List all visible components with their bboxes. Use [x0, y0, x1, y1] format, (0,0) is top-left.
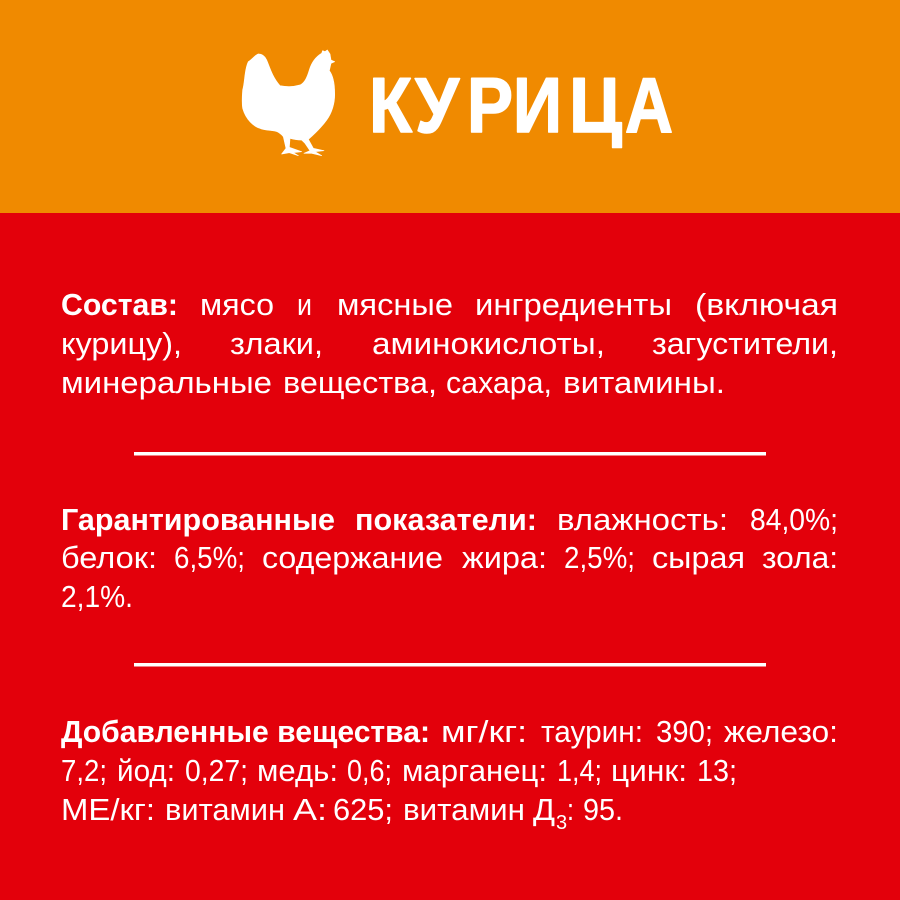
text block: additives: 0,6;	[347, 753, 392, 788]
title: И	[513, 61, 562, 149]
divider	[134, 452, 766, 456]
text block: additives: железо:	[724, 714, 838, 749]
text block: guaranteed values: содержание	[262, 540, 443, 575]
title: К	[369, 61, 412, 149]
text block: guaranteed values: сырая	[652, 540, 745, 575]
text block: composition: мясные	[337, 287, 453, 322]
title	[369, 61, 673, 149]
text block: additives: 390;	[656, 714, 713, 749]
text block: composition: и	[297, 287, 312, 322]
text block: guaranteed values: 84,0%;	[750, 502, 838, 537]
text block: composition: витамины.	[563, 365, 725, 400]
divider	[134, 663, 766, 666]
title: Р	[467, 61, 513, 149]
text block: guaranteed values: влажность:	[557, 502, 728, 537]
title: Ц	[569, 61, 622, 149]
text block: guaranteed values: жира:	[462, 540, 547, 575]
text block: additives: :	[567, 792, 574, 827]
title: У	[415, 61, 460, 149]
text block: composition: курицу),	[61, 326, 182, 361]
text block: additives: таурин:	[541, 714, 643, 749]
text block: additives: витамин	[165, 792, 285, 827]
text block: additives: МЕ/кг:	[61, 792, 155, 827]
text block: additives: 95.	[583, 792, 623, 827]
icon: white chicken silhouette	[242, 50, 335, 156]
text block: guaranteed values: белок:	[61, 540, 157, 575]
text block: additives	[61, 714, 838, 834]
text block: composition: Состав:	[61, 287, 178, 322]
text block: composition: загустители,	[652, 326, 838, 361]
text block: composition	[61, 287, 838, 400]
text block: additives: 0,27;	[185, 753, 248, 788]
text block: additives: марганец:	[402, 753, 547, 788]
text block: guaranteed values: показатели:	[355, 502, 537, 537]
text block: composition: аминокислоты,	[372, 326, 605, 361]
text block: composition: ингредиенты	[475, 287, 672, 322]
text block: additives: 7,2;	[61, 753, 107, 788]
text block: guaranteed values	[61, 502, 838, 614]
panel: orange header	[0, 0, 900, 213]
text block: guaranteed values: зола:	[762, 540, 838, 575]
text block: additives: А:	[293, 792, 327, 827]
text block: composition: вещества,	[283, 365, 437, 400]
text block: additives: витамин	[403, 792, 525, 827]
text block: additives: 3	[556, 812, 567, 834]
text block: composition: злаки,	[230, 326, 323, 361]
text block: additives: 13;	[697, 753, 737, 788]
text block: guaranteed values: Гарантированные	[61, 502, 335, 537]
text block: additives: Добавленные вещества:	[61, 714, 430, 749]
text block: guaranteed values: 6,5%;	[174, 540, 245, 575]
text block: additives: цинк:	[611, 753, 687, 788]
text block: composition: сахара,	[446, 365, 552, 400]
text block: guaranteed values: 2,1%.	[61, 579, 133, 614]
text block: composition: минеральные	[61, 365, 272, 400]
text block: additives: 625;	[333, 792, 393, 827]
text block: composition: (включая	[695, 287, 838, 322]
text block: composition: мясо	[200, 287, 274, 322]
text block: additives: Д	[533, 792, 555, 827]
text block: additives: медь:	[257, 753, 338, 788]
text block: additives: йод:	[117, 753, 175, 788]
panel: red body	[0, 213, 900, 900]
text block: additives: 1,4;	[557, 753, 602, 788]
title: А	[625, 61, 673, 149]
text block: guaranteed values: 2,5%;	[564, 540, 635, 575]
text block: additives: мг/кг:	[441, 714, 527, 749]
